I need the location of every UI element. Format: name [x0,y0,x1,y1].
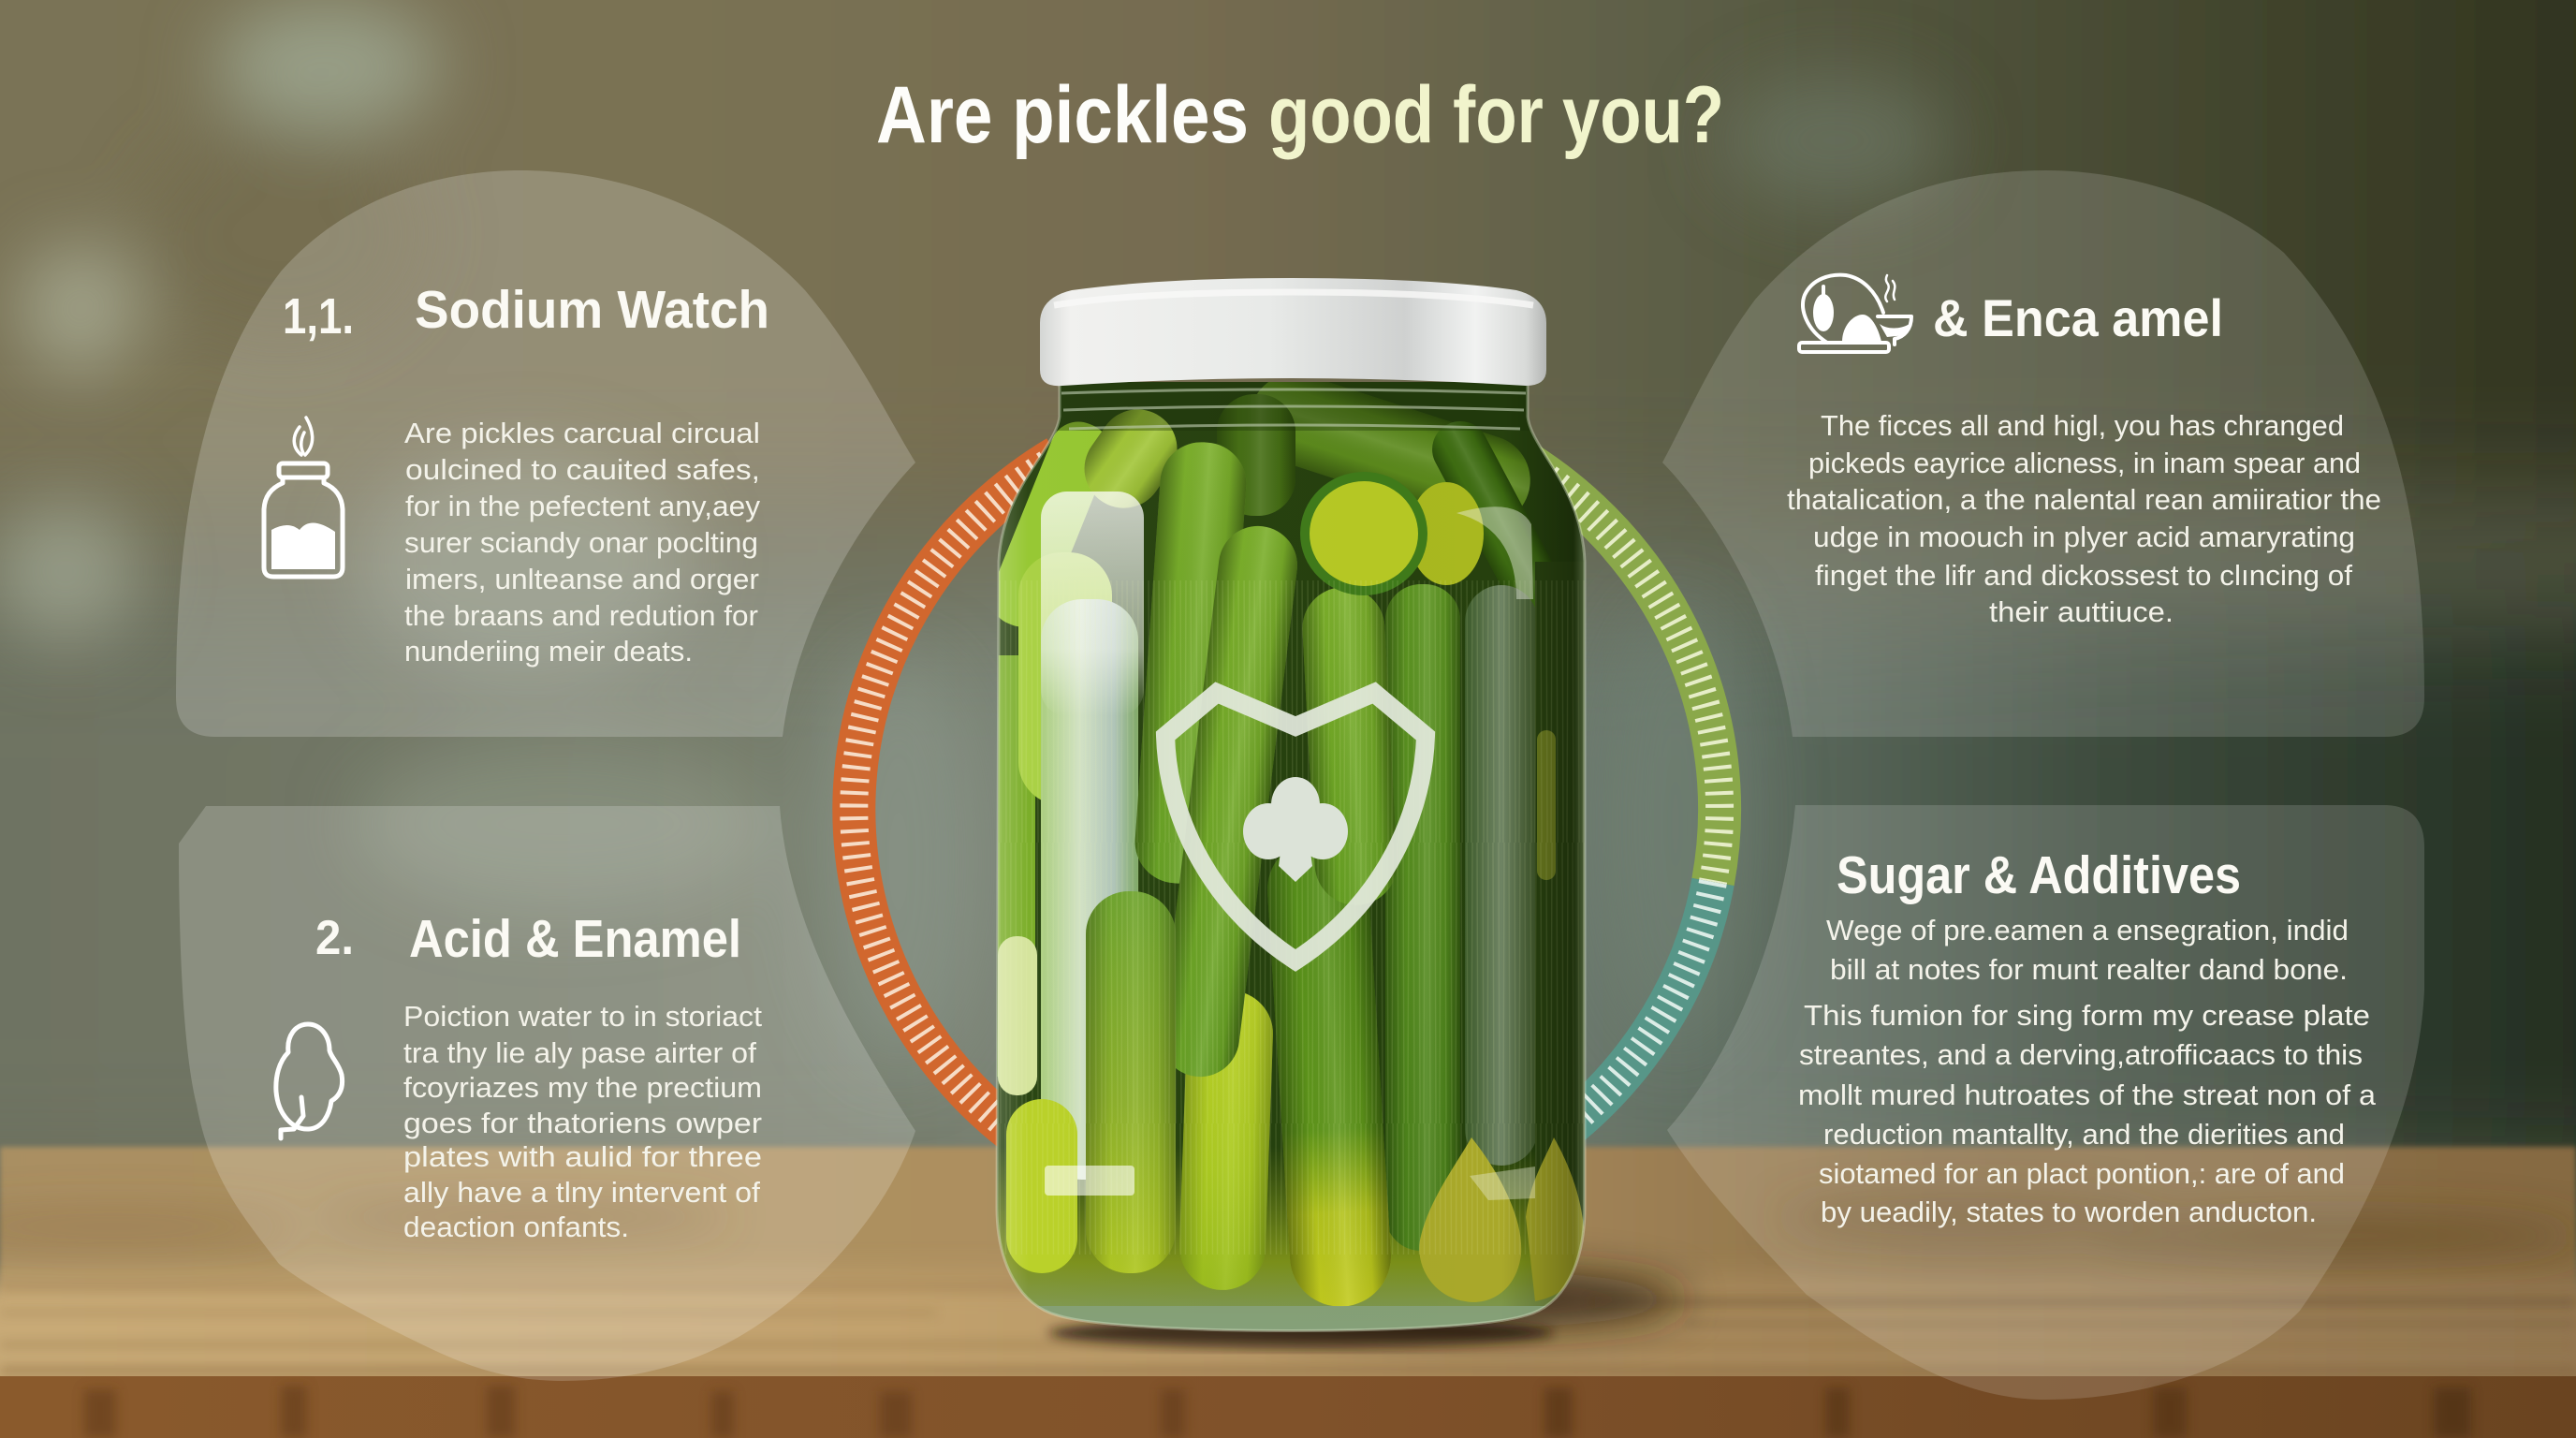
pickle: green with pale top [1086,891,1176,1273]
pickle: small lime behind slice [1417,482,1484,585]
panel: sugar and additives [1667,805,2424,1400]
icon: salt jar with steam [264,418,343,577]
glass reflections [992,379,1591,1339]
jar neck highlights [1061,389,1526,429]
body text: mollt mured hutroates of the streat non of a [1798,1078,2377,1111]
number: 1,1. [283,288,354,345]
arc: orange [854,457,1058,1151]
body text: plates with aulid for three [403,1140,762,1173]
title: Are pickles [876,70,1249,160]
body text: deaction onfants. [403,1211,629,1243]
panel shape: bottom-left dome [179,806,915,1381]
body text [1798,914,2377,1228]
wooden table [0,1147,2576,1438]
body text: streantes, and a derving,atrofficaacs to this [1799,1038,2363,1071]
panel shape: top-right dome [1662,170,2424,737]
body text: Poiction water to in storiact [403,1000,762,1033]
pickle: tall 2 [1385,584,1460,1251]
pickle: lime bottom [1178,989,1275,1292]
body text [403,1000,762,1243]
body text: for in the pefectent any,aey [405,490,761,522]
body text: Are pickles carcual circual [404,417,760,449]
body text: surer sciandy onar poclting [404,526,758,559]
body text: ally have a tlny intervent of [403,1176,760,1209]
panel: sodium watch [176,170,915,737]
body text: finget the lifr and dickossest to clıncing of [1815,559,2352,592]
pickle: long tall 1 [1133,439,1249,887]
body text: thatalication, a the nalental rean amiiratior the [1787,483,2381,516]
body text: imers, unlteanse and orger [405,563,759,595]
pickle: lime left small [1018,552,1112,805]
heading: & Enca amel [1933,288,2223,347]
heading: Sodium Watch [415,280,769,340]
body text: siotamed for an plact pontion,: are of and [1819,1157,2345,1190]
body text: their auttiuce. [1989,595,2174,628]
clover [1243,777,1348,882]
jar of pickles [982,278,1591,1339]
glass outline [997,384,1585,1331]
panel: enamel top right [1662,170,2424,737]
body text: reduction mantallty, and the dierities and [1823,1118,2345,1151]
body text: by ueadily, states to worden anducton. [1821,1196,2317,1228]
lid [1040,278,1546,386]
arc: green [1516,457,1720,882]
icon: shield with clover [1165,693,1426,961]
pickle: pale reflective [1041,599,1138,1180]
panel shape: top-left dome [176,170,915,737]
body text: nunderiing meir deats. [404,635,693,668]
body text: tra thy lie aly pase airter of [403,1036,756,1069]
body text: pickeds eayrice alicness, in inam spear and [1808,447,2361,479]
body text: This fumion for sing form my crease plate [1804,999,2370,1032]
body text: the braans and redution for [404,599,758,632]
body text: oulcined to cauited safes, [405,453,760,486]
number: 2. [315,911,354,965]
ring: segmented arc around the jar [854,457,1720,1151]
pickle: top diagonal [1257,382,1530,506]
body text: udge in moouch in plyer acid amaryrating [1813,521,2355,553]
panel shape: bottom-right dome [1667,805,2424,1400]
body text [1787,409,2381,628]
icon: tooth or organ outline [276,1024,343,1138]
title [876,70,1724,160]
heading: Sugar & Additives [1837,845,2241,905]
pickle: grey-green right [1465,585,1538,1166]
pickle: bottom right yellow [1419,1137,1521,1302]
body text: fcoyriazes my the prectium [403,1071,762,1104]
body text: The ficces all and higl, you has chranged [1821,409,2344,442]
pickle: lime bottom left [1006,1099,1077,1273]
icon: plate, bottle and bowl [1799,275,1911,352]
pickle: tall 3 [1156,521,1302,1081]
pickle: central [1265,836,1394,1310]
body text: Wege of pre.eamen a ensegration, indid [1826,914,2349,946]
heading: Acid & Enamel [409,909,741,969]
pickle skin grain [992,580,1591,1255]
body text [404,417,761,668]
body text: goes for thatoriens owper [403,1107,762,1139]
arc: teal [1535,882,1713,1151]
title: good for you? [1268,70,1724,160]
panel: acid and enamel [179,806,915,1381]
body text: bill at notes for munt realter dand bone. [1830,953,2348,986]
pickle: tall 4 [1300,585,1399,907]
jar contents [982,361,1591,1339]
pickle slice [1300,472,1427,595]
